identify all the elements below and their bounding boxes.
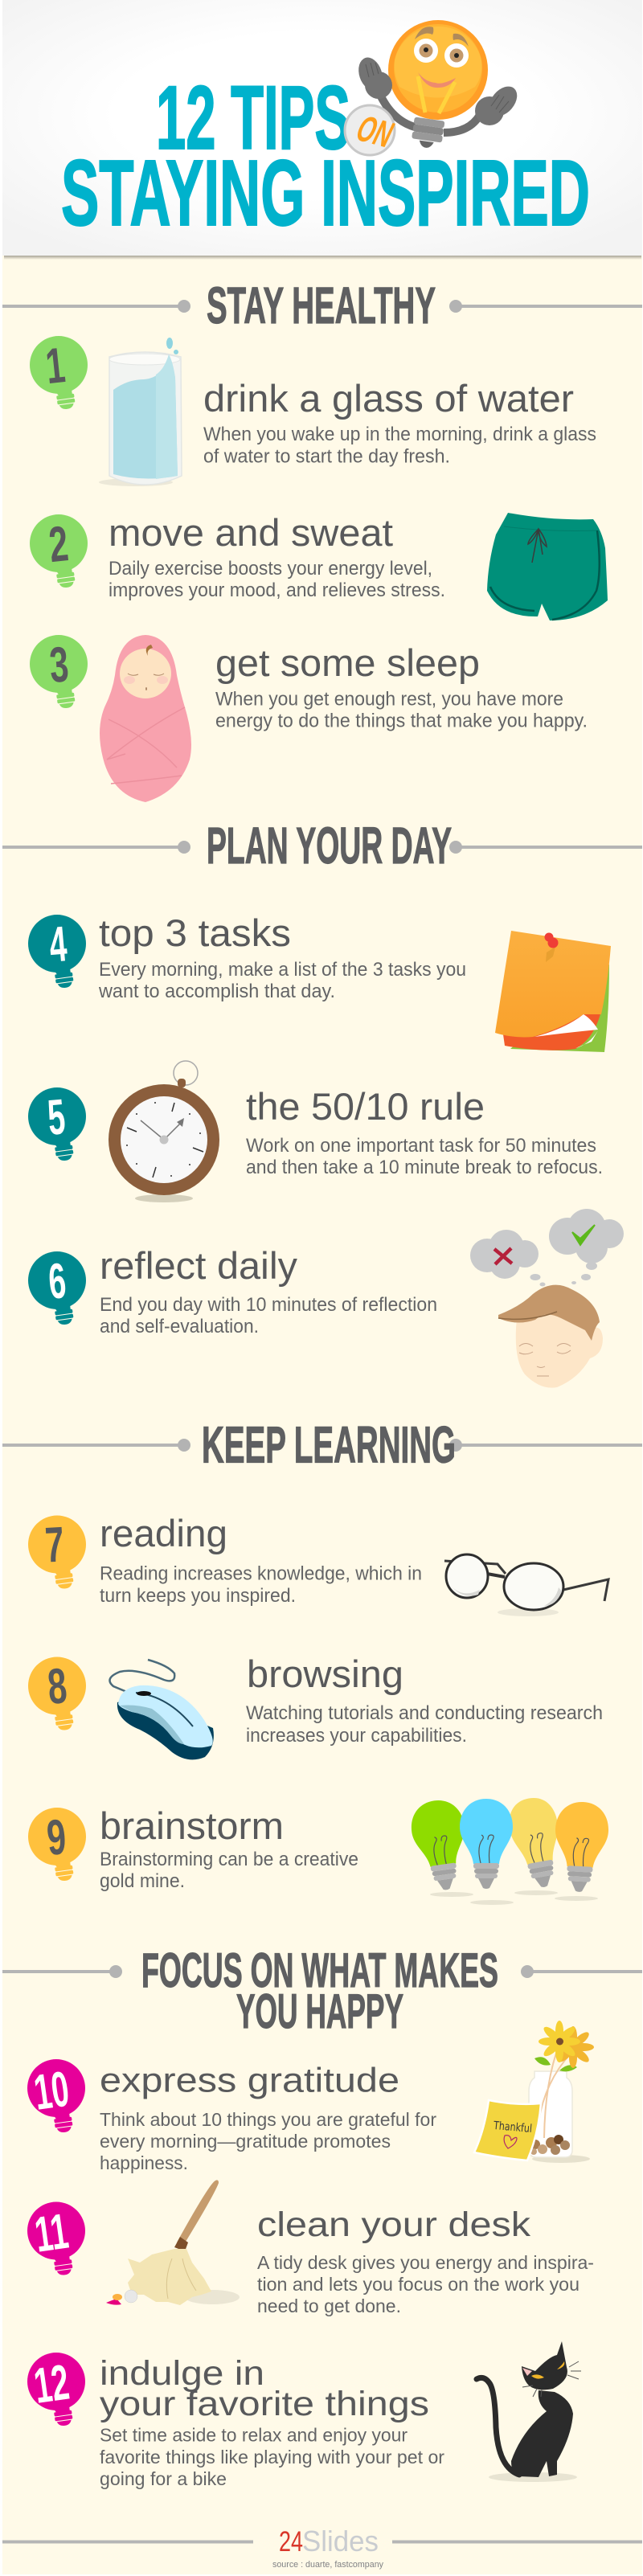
logo: 24Slides: 24 [279, 2526, 303, 2558]
tip 10: text: Think about 10 things you are grateful for [100, 2109, 436, 2130]
tip 9: bulb number: 9 [45, 1809, 68, 1866]
tip 9: bulb number [28, 1808, 86, 1882]
footer lines [2, 2540, 642, 2543]
tip 4: text: Every morning, make a list of the 3 tasks you [99, 959, 466, 981]
section heading: focus on what makes you happy: YOU HAPPY [236, 1984, 403, 2038]
tip 7: text: Reading increases knowledge, which in [100, 1562, 422, 1585]
icon: flower jar with thankful note: Thankful [493, 2119, 533, 2136]
icon: green shorts [487, 513, 608, 620]
tip 4: bulb number [28, 915, 86, 989]
tip 11: text: need to get done. [257, 2295, 401, 2316]
tip 11: bulb number [27, 2202, 85, 2276]
tip 9: text: gold mine. [100, 1870, 185, 1892]
icon: sticky notes [495, 931, 611, 1052]
tip 8: text [246, 1652, 603, 1747]
icon: swaddled baby [100, 635, 191, 802]
tip 12: bulb number [27, 2353, 85, 2427]
icon: light bulb mascot [354, 20, 522, 149]
tip 1: text [203, 377, 596, 468]
tip 10: text: happiness. [100, 2152, 188, 2173]
tip 1: text: of water to start the day fresh. [203, 445, 450, 468]
section heading: plan your day: PLAN YOUR DAY [207, 817, 452, 874]
tip 3: bulb number [30, 635, 88, 709]
tip 10: bulb number [27, 2059, 85, 2133]
tip 7: text [100, 1512, 422, 1607]
tip 10: bulb number: 10 [31, 2060, 72, 2120]
tip 12: text: indulge in [100, 2354, 264, 2393]
source credit: source : duarte, fastcompany [272, 2560, 383, 2570]
tip 4: text: want to accomplish that day. [98, 981, 335, 1002]
section heading: keep learning: KEEP LEARNING [202, 1416, 456, 1474]
tip 12: text: your favorite things [100, 2385, 429, 2423]
tip 4: bulb number: 4 [47, 915, 69, 973]
tip 7: text: turn keeps you inspired. [100, 1585, 296, 1607]
tip 11: bulb number: 11 [31, 2202, 72, 2263]
tip 12: text: going for a bike [100, 2468, 227, 2489]
badge: ON: ON [350, 108, 400, 155]
tip 2: text [109, 511, 445, 601]
tip 3: text [215, 641, 588, 731]
tip 9: text: Brainstorming can be a creative [100, 1849, 358, 1870]
section heading: keep learning [2, 1416, 642, 1474]
badge: ON [345, 105, 400, 155]
tip 5: bulb number [28, 1087, 86, 1161]
tip 5: text: and then take a 10 minute break to refocus. [246, 1157, 603, 1178]
tip 3: bulb number: 3 [47, 637, 71, 694]
tip 11: text: tion and lets you focus on the work you [257, 2274, 580, 2295]
tip 6: text: and self-evaluation. [100, 1316, 259, 1337]
tip 12: text: favorite things like playing with your pet or [100, 2447, 444, 2467]
tip 8: text: browsing [247, 1652, 403, 1695]
tip 4: text [98, 911, 466, 1002]
section heading: stay healthy: STAY HEALTHY [207, 276, 436, 334]
icon: computer mouse [109, 1660, 214, 1759]
tip 2: bulb number [30, 514, 88, 588]
icon: black cat [477, 2341, 581, 2482]
tip 3: text: energy to do the things that make you happy. [215, 711, 588, 731]
tip 7: bulb number [28, 1516, 86, 1590]
tip 1: text: drink a glass of water [203, 377, 574, 420]
tip 5: bulb number: 5 [45, 1088, 68, 1145]
section heading: stay healthy [2, 276, 642, 334]
tip 12: text: Set time aside to relax and enjoy your [100, 2424, 408, 2445]
tip 11: text [257, 2205, 594, 2316]
tip 12: bulb number: 12 [31, 2353, 72, 2414]
tip 1: bulb number: 1 [43, 338, 68, 395]
icon: pocket watch [109, 1061, 219, 1202]
tip 10: text: every morning—gratitude promotes [100, 2131, 391, 2152]
tip 6: text [100, 1244, 437, 1337]
tip 6: text: End you day with 10 minutes of reflection [100, 1294, 437, 1316]
tip 9: text: brainstorm [100, 1804, 284, 1847]
tip 10: text: express gratitude [100, 2061, 399, 2099]
tip 11: text: A tidy desk gives you energy and inspira- [257, 2252, 594, 2273]
tip 1: text: When you wake up in the morning, drink a glass [203, 424, 596, 445]
logo: 24Slides: Slides [302, 2525, 379, 2558]
tip 8: bulb number [28, 1657, 86, 1731]
tip 5: text [246, 1085, 603, 1178]
tip 11: text: clean your desk [257, 2205, 531, 2244]
tip 7: text: reading [100, 1512, 227, 1554]
tip 9: text [100, 1804, 358, 1892]
header panel [2, 0, 642, 260]
tip 6: bulb number: 6 [46, 1252, 68, 1309]
icon: thinking head with clouds [470, 1209, 624, 1388]
tip 7: bulb number: 7 [43, 1517, 65, 1574]
tip 1: bulb number [30, 336, 88, 410]
icon: glass of water [99, 338, 182, 486]
tip 2: text: move and sweat [109, 511, 393, 554]
tip 3: text: get some sleep [215, 641, 480, 684]
tip 8: text: Watching tutorials and conducting research [246, 1702, 603, 1724]
tip 4: text: top 3 tasks [99, 911, 291, 954]
icon: feather duster [106, 2180, 240, 2305]
icon: four colored light bulbs [408, 1794, 610, 1905]
tip 2: text: improves your mood, and relieves stress. [109, 579, 445, 601]
tip 12: text [100, 2354, 444, 2489]
tip 5: text: the 50/10 rule [246, 1085, 485, 1128]
title [61, 68, 590, 245]
tip 6: text: reflect daily [100, 1244, 298, 1287]
icon: eyeglasses [444, 1554, 608, 1616]
tip 6: bulb number [28, 1251, 86, 1325]
tip 5: text: Work on one important task for 50 minutes [246, 1135, 596, 1157]
section heading: focus on what makes you happy [2, 1943, 642, 2038]
section heading: plan your day [2, 817, 642, 874]
tip 8: bulb number: 8 [46, 1658, 69, 1715]
tip 2: text: Daily exercise boosts your energy level, [109, 558, 432, 579]
tip 3: text: When you get enough rest, you have more [215, 688, 563, 711]
tip 2: bulb number: 2 [47, 516, 71, 573]
tip 10: text [100, 2061, 436, 2173]
tip 8: text: increases your capabilities. [246, 1725, 467, 1747]
title: 12 TIPS [156, 68, 350, 168]
icon: flower jar with thankful note [474, 2021, 594, 2163]
